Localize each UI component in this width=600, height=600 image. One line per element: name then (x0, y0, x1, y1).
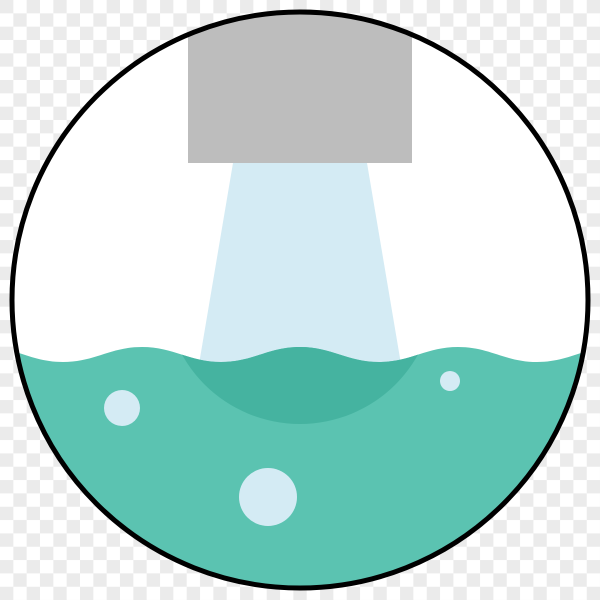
splash bowl (182, 347, 418, 424)
water stream (198, 163, 402, 370)
water body (20, 347, 580, 586)
bubbles (104, 390, 140, 426)
tap spout (188, 0, 412, 163)
